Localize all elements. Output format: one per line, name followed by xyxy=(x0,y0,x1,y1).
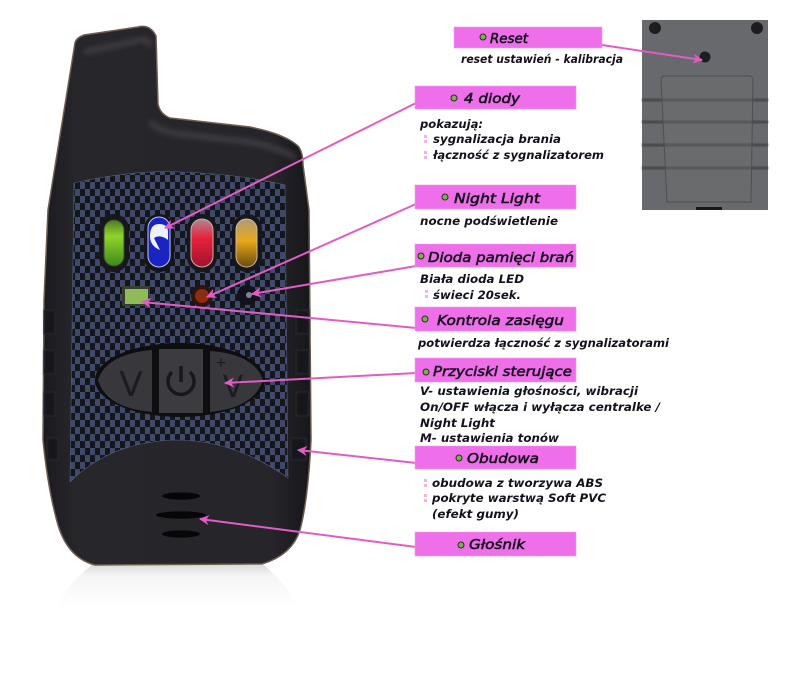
callout: Night Light: Night Light xyxy=(454,191,541,207)
callout: Kontrola zasięgu: Kontrola zasięgu xyxy=(437,313,564,329)
side grips left xyxy=(44,310,58,460)
callout: 4 diody: łączność z sygnalizatorem xyxy=(432,148,604,162)
callout: Przyciski sterujące: Night Light xyxy=(420,416,496,430)
arrow: Dioda pamięci xyxy=(252,266,416,294)
callout: Dioda pamięci brań xyxy=(415,244,576,302)
arrow: Kontrola zasięgu xyxy=(142,302,416,328)
callout: Night Light xyxy=(415,185,576,228)
reset hole xyxy=(700,52,710,62)
callout: Przyciski sterujące xyxy=(415,358,661,445)
side grips right xyxy=(291,310,309,460)
carbon panel xyxy=(70,172,288,482)
screws xyxy=(649,22,763,34)
callout: 4 diody: sygnalizacja brania xyxy=(433,132,561,146)
memory LED amber xyxy=(191,285,213,307)
LED green xyxy=(99,214,129,272)
callout: Głośnik xyxy=(415,532,576,556)
callout: 4 diody: 4 diody xyxy=(464,91,521,107)
callout: Dioda pamięci brań: świeci 20sek. xyxy=(433,288,521,302)
callout: Reset: reset ustawień - kalibracja xyxy=(461,52,623,66)
LED amber xyxy=(232,214,262,272)
device reflection xyxy=(58,565,296,608)
LED red xyxy=(187,214,217,272)
callout: 4 diody: pokazują: xyxy=(419,117,483,131)
speaker slots xyxy=(156,492,206,538)
door latch xyxy=(696,207,722,210)
arrow: Obudowa xyxy=(298,450,416,463)
button labels: V xyxy=(223,370,244,405)
callout: Obudowa: Obudowa xyxy=(467,451,539,467)
callout: Reset: Reset xyxy=(490,31,529,47)
button labels: + xyxy=(215,355,227,371)
callout: Kontrola zasięgu: potwierdza łączność z sygnalizatorami xyxy=(417,336,670,350)
back grooves xyxy=(642,100,768,168)
back view photo xyxy=(642,20,768,210)
callout: Przyciski sterujące: On/OFF włącza i wyłącza centralke / xyxy=(420,400,661,414)
memory LED white xyxy=(237,285,257,305)
callout: Przyciski sterujące: M- ustawienia tonów xyxy=(420,431,559,445)
arrow: Reset xyxy=(602,45,702,60)
battery door xyxy=(661,76,753,202)
callout: Kontrola zasięgu xyxy=(415,307,670,350)
arrow: Night Light xyxy=(207,204,416,297)
arrow: 4 diody xyxy=(165,103,416,228)
callout: Obudowa xyxy=(415,446,607,521)
device: front of receiver xyxy=(43,26,311,565)
range indicator xyxy=(122,286,150,306)
callout: 4 diody xyxy=(415,86,604,162)
callout: Dioda pamięci brań: Dioda pamięci brań xyxy=(428,250,574,266)
callout: Dioda pamięci brań: Biała dioda LED xyxy=(420,272,524,286)
arrow: Głośnik xyxy=(200,519,416,547)
callout: Night Light: nocne podświetlenie xyxy=(420,214,558,228)
power icon xyxy=(168,366,194,394)
device body xyxy=(43,26,311,565)
callout: Reset xyxy=(454,27,623,66)
callout: Obudowa: obudowa z tworzywa ABS xyxy=(432,476,603,490)
top highlight xyxy=(84,40,296,158)
callout: Obudowa: pokryte warstwą Soft PVC xyxy=(431,491,607,505)
callout: Przyciski sterujące: Przyciski sterujące xyxy=(433,364,572,380)
callout: Obudowa: (efekt gumy) xyxy=(432,507,519,521)
button labels: V xyxy=(119,365,143,405)
arrow: Przyciski xyxy=(225,373,416,383)
callout: Głośnik: Głośnik xyxy=(469,537,526,553)
button cluster xyxy=(95,343,265,417)
LED blue xyxy=(144,214,174,272)
callout: Przyciski sterujące: V- ustawienia głośności, wibracji xyxy=(420,384,639,398)
button labels xyxy=(119,355,244,405)
